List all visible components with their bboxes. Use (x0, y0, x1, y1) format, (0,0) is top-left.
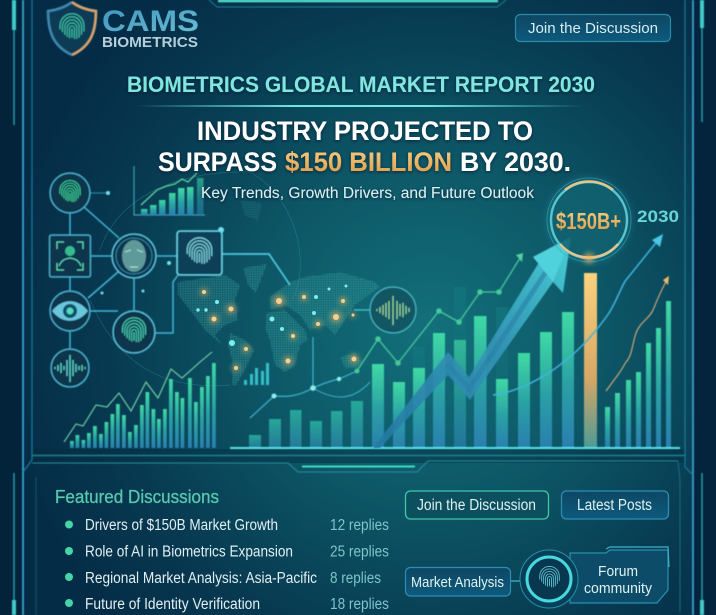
icon: voice wave circle (51, 349, 89, 387)
button: join the discussion (header): Join the Discussion (528, 20, 658, 37)
biometric network (50, 173, 290, 387)
button: join the discussion (header) (516, 14, 670, 42)
icon: fingerprint circle (50, 173, 90, 213)
panel: forum community: community (584, 580, 652, 597)
world map with hotspots (90, 172, 380, 386)
button: latest posts (562, 491, 668, 519)
reply counts: 25 replies (330, 544, 389, 560)
icon: eye circle (50, 291, 90, 331)
icon: shield with fingerprint (48, 2, 96, 55)
dim background bars (413, 287, 508, 448)
chart: left bar chart with trend line (64, 352, 216, 448)
bullet list: Drivers of $150B Market Growth (85, 517, 278, 534)
year label 2030: 2030 (637, 207, 679, 226)
button: market analysis: Market Analysis (411, 574, 504, 591)
reply counts: 12 replies (330, 517, 389, 534)
bullet list: Role of AI in Biometrics Expansion (85, 544, 293, 560)
headline: $150 BILLION (285, 147, 452, 177)
callout: $150B+ ring: $150B+ (556, 208, 621, 234)
subtitle: Key Trends, Growth Drivers, and Future Outlook (201, 185, 534, 202)
icon: voice wave on map (354, 287, 416, 333)
chart: small upper bars (134, 166, 205, 215)
bullet list (65, 517, 317, 613)
logo: BIOMETRICS (102, 34, 198, 51)
report title: BIOMETRICS GLOBAL MARKET REPORT 2030 (127, 72, 595, 97)
heading: Featured Discussions (55, 486, 219, 507)
reply counts: 18 replies (330, 596, 389, 613)
reply counts: 8 replies (330, 570, 381, 587)
icon: fingerprint badge (520, 550, 578, 608)
button: join the discussion: Join the Discussion (417, 497, 536, 514)
bullet list: Regional Market Analysis: Asia-Pacific (85, 570, 317, 587)
reply counts (330, 517, 389, 613)
bullet list: Future of Identity Verification (85, 596, 260, 613)
button: join the discussion (406, 491, 548, 519)
logo (48, 2, 199, 55)
button: latest posts: Latest Posts (577, 497, 652, 514)
trend lines (250, 234, 669, 418)
icon: fingerprint square (177, 231, 222, 275)
panel: featured discussions (55, 486, 389, 613)
callout: $150B+ ring (545, 176, 633, 264)
bars (249, 401, 363, 448)
gold bar (584, 273, 597, 448)
chart: main bar chart (230, 273, 680, 449)
logo wordmark: CAMS (102, 5, 199, 38)
big growth arrow (373, 237, 571, 448)
icon: face scan square (50, 235, 90, 277)
headline: SURPASS (158, 147, 277, 177)
panel: forum community (570, 547, 669, 603)
headline: BY 2030. (460, 147, 571, 177)
connectors (70, 193, 290, 349)
headline: INDUSTRY PROJECTED TO (197, 116, 533, 146)
small cyan bars (244, 363, 269, 385)
baseline (230, 447, 680, 449)
icon: face recognition circle (112, 234, 156, 278)
headline (158, 116, 571, 177)
hotspots (196, 284, 359, 372)
panel: forum community: Forum (598, 563, 638, 580)
icon: fingerprint circle lower (113, 311, 155, 353)
button: market analysis (406, 568, 526, 596)
